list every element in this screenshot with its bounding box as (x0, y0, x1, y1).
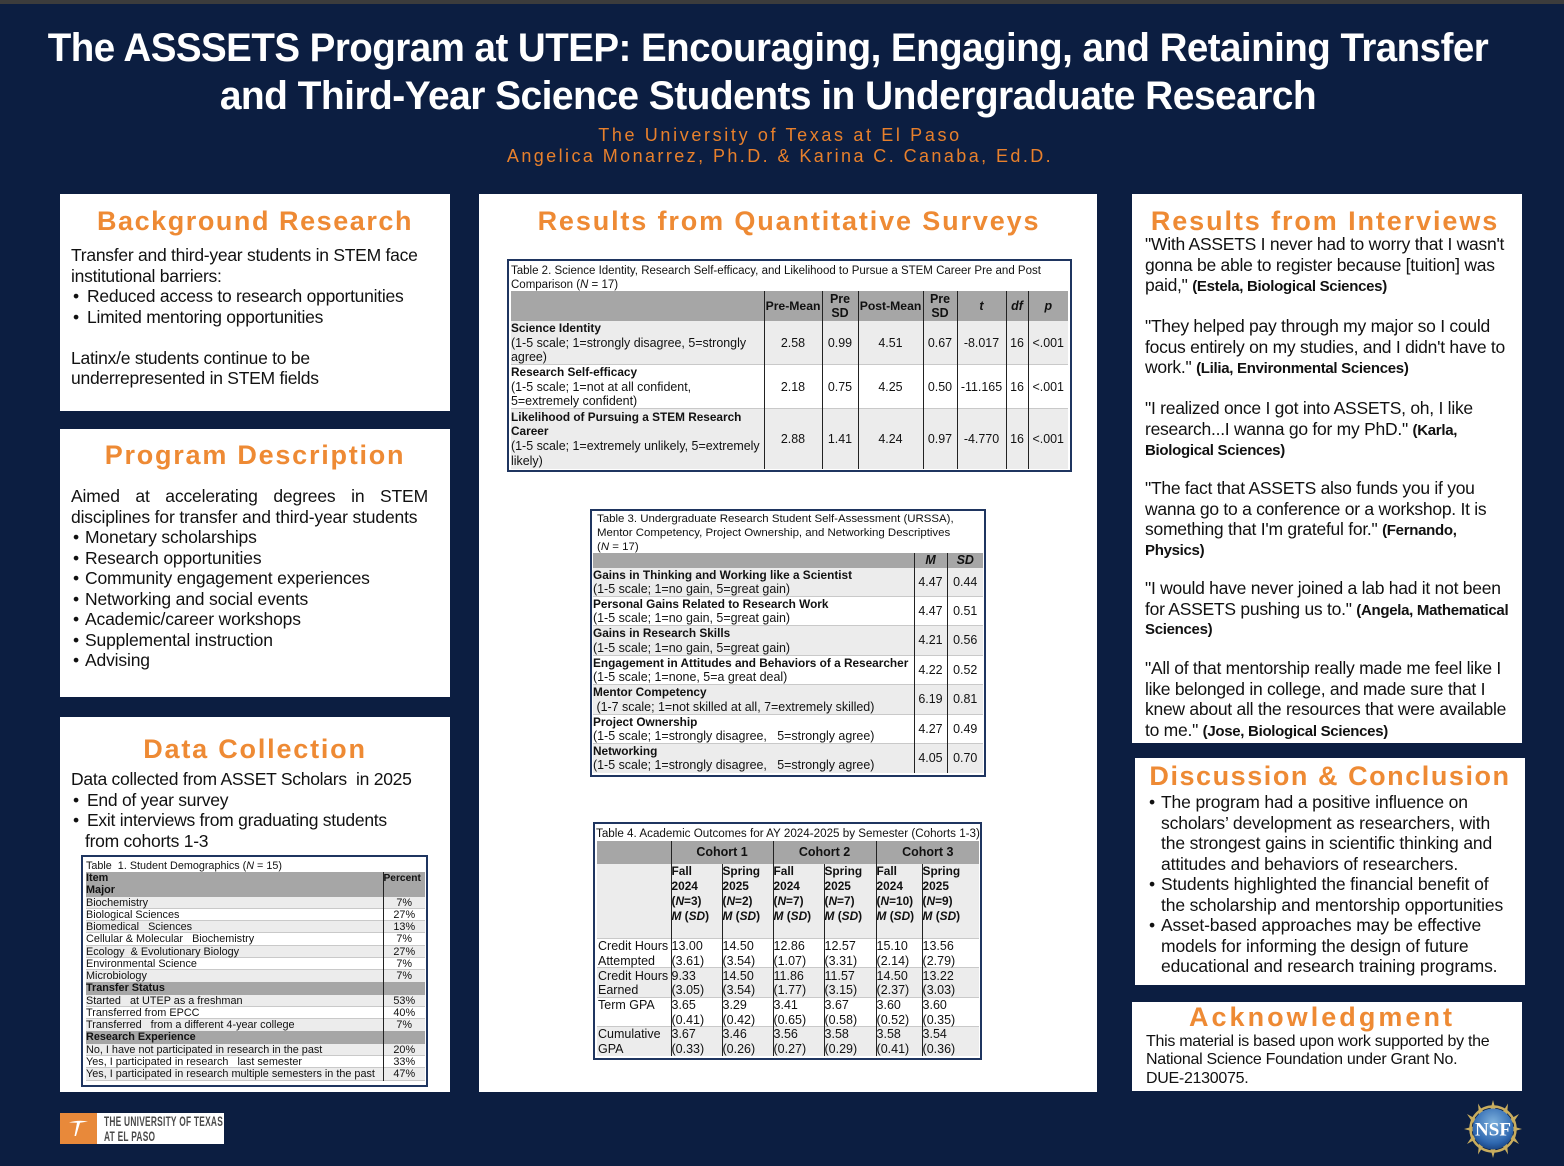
table 3 data: 0.70 (953, 751, 977, 765)
panel: background research (60, 194, 450, 411)
table 3 data: (1-7 scale; 1=not skilled at all, 7=extremely skilled) (596, 700, 874, 714)
table 4 data: 3.65 (672, 998, 696, 1012)
table 4 data: (3.31) (825, 954, 857, 968)
heading: discussion and conclusion: Discussion & Conclusion (1149, 761, 1511, 791)
table 4 data: Credit Hours (598, 968, 668, 982)
text: program description: disciplines for transfer and third-year students (71, 506, 417, 526)
authors and affiliation: Angelica Monarrez, Ph.D. & Karina C. Canaba, Ed.D. (507, 146, 1053, 166)
quote: Estela: "With ASSETS I never had to worry that I wasn't (1145, 234, 1504, 254)
table 4 data: 15.10 (877, 939, 908, 953)
table 2 data: -4.770 (964, 432, 999, 446)
table 4 data: (0.42) (722, 1012, 755, 1026)
quote: Estela: gonna be able to register because [tuition] was (1145, 254, 1495, 274)
table 4 data: Spring (923, 864, 960, 878)
table 2 data: 16 (1010, 432, 1024, 446)
table 4 data: 3.29 (722, 998, 747, 1012)
table 4 data: (3.03) (923, 983, 955, 997)
logo wordmark: AT EL PASO (104, 1128, 155, 1144)
table 4 data: Cumulative (598, 1027, 661, 1041)
title (48, 26, 1488, 118)
table 3 data: 0.56 (953, 633, 977, 647)
table 2 caption: Table 2. Science Identity, Research Self-efficacy, and Likelihood to Pursue a STEM Career Pre and Post (511, 265, 1041, 277)
quote: Angela: "I would have never joined a lab had it not been (1145, 578, 1501, 598)
table 4 data: (N=7) (774, 894, 804, 908)
text: program description: Advising (85, 650, 150, 670)
text: background research: underrepresented in STEM fields (71, 368, 319, 388)
table 4 data: (0.29) (825, 1042, 857, 1056)
table 2 data: 16 (1010, 336, 1024, 350)
text: acknowledgment (1146, 1032, 1489, 1086)
table 4 data: Fall (672, 864, 692, 878)
table 4 data: (N=3) (672, 894, 702, 908)
table 3: URSSA descriptives (590, 509, 986, 777)
table 2 data: 2.18 (781, 380, 805, 394)
table 2 data: likely) (511, 454, 543, 468)
table 2 data: 4.24 (878, 432, 903, 446)
table 4 data: (3.54) (722, 954, 755, 968)
table 4 data: (0.41) (672, 1012, 704, 1026)
table 2 data: 4.51 (878, 336, 903, 350)
top bar (0, 0, 1564, 4)
quote: Lilia: work." (Lilia, Environmental Sciences) (1145, 357, 1409, 377)
table 2 data: 0.97 (928, 432, 952, 446)
quote: Fernando (1145, 478, 1486, 558)
table 4 data: (1.77) (774, 983, 806, 997)
table 3 data: 4.47 (918, 604, 943, 618)
table 2 data: 2.58 (781, 336, 805, 350)
table 4 data: (3.54) (722, 983, 755, 997)
table 4 data: 2025 (825, 879, 851, 893)
table 1 data: Percent (384, 872, 421, 884)
table 3 data: (1-5 scale; 1=no gain, 5=great gain) (593, 611, 790, 625)
heading: quantitative surveys: Results from Quantitative Surveys (538, 206, 1040, 236)
table 3 caption: Table 3. Undergraduate Research Student Self-Assessment (URSSA), (597, 513, 954, 525)
table 2 data: -11.165 (961, 380, 1002, 394)
table 4 data: 12.57 (825, 939, 856, 953)
quote: Karla: Biological Sciences) (1145, 442, 1285, 459)
table 4 data: 2024 (672, 879, 698, 893)
quote: Estela (1145, 234, 1504, 295)
quote: Angela: Sciences) (1145, 621, 1212, 638)
table 2 data: 4.25 (878, 380, 903, 394)
table 4 data: (0.36) (923, 1042, 955, 1056)
quote: Jose: knew about all the resources that were available (1145, 699, 1506, 719)
quote: Jose: "All of that mentorship really made me feel like I (1145, 658, 1501, 678)
text: program description: Aimed at accelerating degrees in STEM (71, 486, 428, 506)
quote: Karla: research...I wanna go for my PhD." (Karla, (1145, 418, 1457, 438)
table 3 data: 6.19 (918, 692, 943, 706)
table 3 data: Engagement in Attitudes and Behaviors of a Researcher (593, 656, 908, 670)
table 2 data: 0.75 (828, 380, 852, 394)
text: background research: institutional barriers: (71, 266, 222, 286)
table 4 data: (1.07) (774, 954, 806, 968)
panel: results from quantitative surveys (479, 194, 1097, 1092)
logo wordmark: THE UNIVERSITY OF TEXAS (104, 1114, 223, 1129)
table 4 data: Spring (722, 864, 760, 878)
table 4 data: (2.14) (877, 954, 909, 968)
table 4 data: (0.65) (774, 1012, 806, 1026)
table 4 caption: Table 4. Academic Outcomes for AY 2024-2025 by Semester (Cohorts 1-3) (596, 827, 980, 840)
table 2 data: Post-Mean (860, 299, 921, 313)
table 1 data: Yes, I participated in research multiple semesters in the past (86, 1068, 375, 1080)
text: discussion and conclusion: the scholarship and mentorship opportunities (1161, 894, 1503, 914)
table 3 data: (1-5 scale; 1=no gain, 5=great gain) (593, 640, 790, 654)
table 4 data: M (SD) (774, 909, 811, 923)
table 3 data: 0.49 (953, 722, 977, 736)
table 4 data: (2.79) (923, 954, 955, 968)
table 4 data: 3.41 (774, 998, 798, 1012)
table 2 data (511, 291, 1068, 469)
heading: results from interviews: Results from Interviews (1151, 206, 1499, 236)
table 4 data: 3.54 (923, 1027, 947, 1041)
table 4 data: 14.50 (877, 968, 908, 982)
text: data collection: from cohorts 1-3 (85, 830, 208, 850)
table 4 data: Fall (774, 864, 794, 878)
table 1 data: Transfer Status (86, 982, 165, 994)
table 4 data: M (SD) (672, 909, 709, 923)
table 2 data: SD (831, 306, 849, 320)
table 3 data: Project Ownership (593, 714, 697, 728)
table 2 data: p (1044, 299, 1052, 313)
quote: Karla: "I realized once I got into ASSETS, oh, I like (1145, 398, 1473, 418)
table 3 data: 0.81 (953, 692, 977, 706)
table 4 data: 3.60 (877, 998, 901, 1012)
text: program description: Supplemental instruction (85, 630, 273, 650)
table 2 data: Research Self-efficacy (511, 365, 637, 379)
table 2 data: 2.88 (781, 432, 805, 446)
quote: Jose: like belonged in college, and made sure that I (1145, 678, 1485, 698)
quote: Lilia: "They helped pay through my major so I could (1145, 316, 1490, 336)
table 2 data: df (1011, 299, 1023, 313)
text: discussion and conclusion: scholars’ development as researchers, with (1161, 812, 1490, 832)
table 3 data: Gains in Thinking and Working like a Scientist (593, 568, 852, 582)
table 4 data: 2025 (722, 879, 749, 893)
table 1 data: 7% (396, 933, 412, 945)
quote: Karla (1145, 398, 1473, 459)
table 3 data: Mentor Competency (593, 685, 707, 699)
text: discussion and conclusion: Students highlighted the financial benefit of (1161, 874, 1488, 894)
table 4 data: 12.86 (774, 939, 805, 953)
title: The ASSSETS Program at UTEP: Encouraging, Engaging, and Retaining Transfer (48, 26, 1488, 70)
text: data collection: Data collected from ASSET Scholars in 2025 (71, 769, 412, 789)
table 4 data: 13.56 (923, 939, 954, 953)
table 4 data: 3.67 (825, 998, 849, 1012)
table 2 data: (1-5 scale; 1=not at all confident, (511, 380, 691, 394)
table 3 data: Networking (593, 744, 657, 758)
text: program description: Research opportunities (85, 548, 261, 568)
table 3 data: (1-5 scale; 1=none, 5=a great deal) (593, 670, 787, 684)
text: program description: Monetary scholarships (85, 527, 257, 547)
table 3 data (593, 553, 983, 773)
table 4 data: 3.46 (722, 1027, 747, 1041)
text: program description: Academic/career workshops (85, 609, 301, 629)
table 3 data: (1-5 scale; 1=strongly disagree, 5=strongly agree) (593, 758, 874, 772)
text: discussion and conclusion (1150, 792, 1503, 976)
quote: Fernando: wanna go to a conference or a workshop. It is (1145, 498, 1486, 518)
table 3 data: 4.22 (918, 663, 943, 677)
table 2 data: <.001 (1032, 432, 1064, 446)
panel: acknowledgment (1132, 1002, 1522, 1091)
table 3 data: 0.52 (953, 663, 977, 677)
text: discussion and conclusion: models for informing the design of future (1161, 936, 1468, 956)
text: program description (71, 486, 428, 670)
table 4 data: 13.00 (672, 939, 703, 953)
table 2 data: <.001 (1032, 380, 1064, 394)
table 2 data: (1-5 scale; 1=extremely unlikely, 5=extremely (511, 439, 760, 453)
table 4 data: (0.52) (877, 1012, 909, 1026)
text: data collection: Exit interviews from graduating students (87, 810, 387, 830)
table 2: pre and post comparison (507, 259, 1072, 472)
text: background research (71, 245, 418, 388)
authors and affiliation: The University of Texas at El Paso (598, 125, 962, 145)
table 4 data: (N=10) (877, 894, 913, 908)
quote: Fernando: Physics) (1145, 542, 1204, 558)
table 2 data: (1-5 scale; 1=strongly disagree, 5=strongly (511, 336, 746, 350)
table 2 data: 0.67 (928, 336, 952, 350)
panel: program description (60, 429, 450, 697)
table 4 data: M (SD) (877, 909, 914, 923)
table 4 data: (0.41) (877, 1042, 909, 1056)
table 4 data: Earned (598, 983, 638, 997)
panel: results from interviews (1132, 194, 1522, 743)
table 4 data: 3.60 (923, 998, 947, 1012)
table 2 caption: Comparison (N = 17) (511, 279, 618, 291)
table 1 data (86, 872, 425, 1081)
table 4 data: (N=9) (923, 894, 953, 908)
heading: background research: Background Research (97, 206, 413, 236)
table 2 data: <.001 (1032, 336, 1064, 350)
icon: UTEP pick mark (60, 1113, 97, 1144)
quote: Lilia: focus entirely on my studies, and I didn't have to (1145, 336, 1505, 356)
text: acknowledgment: This material is based upon work supported by the (1146, 1032, 1489, 1050)
panel: discussion and conclusion (1135, 758, 1525, 985)
table 4 data: Term GPA (598, 998, 655, 1012)
table 4 data: 3.67 (672, 1027, 696, 1041)
title: and Third-Year Science Students in Undergraduate Research (220, 74, 1316, 118)
table 4 data: Cohort 1 (696, 845, 748, 859)
table 3 data: SD (957, 553, 974, 567)
table 2 data: Pre (930, 292, 950, 306)
table 4 data: (N=7) (825, 894, 855, 908)
table 1 caption: Table 1. Student Demographics (N = 15) (86, 860, 282, 872)
logo: NSF: NSF (1475, 1120, 1511, 1140)
quote: Estela: paid," (Estela, Biological Sciences) (1145, 275, 1387, 295)
table 2 data: 5=extremely confident) (511, 394, 637, 408)
table 4 data: (0.26) (722, 1042, 755, 1056)
table 3 caption: Mentor Competency, Project Ownership, and Networking Descriptives (597, 527, 950, 539)
table 2 data: 0.99 (828, 336, 852, 350)
table 4 data: Cohort 3 (902, 845, 953, 859)
table 4 data: 2025 (923, 879, 949, 893)
table 4 data: (0.33) (672, 1042, 704, 1056)
table 4 data (597, 841, 979, 1056)
table 1 data: Cellular & Molecular Biochemistry (86, 933, 254, 945)
table 4 data: 14.50 (722, 939, 754, 953)
table 2 data: Pre (830, 292, 850, 306)
table 4 data: (0.35) (923, 1012, 955, 1026)
table 3 caption (597, 513, 954, 553)
table 3 data: Gains in Research Skills (593, 626, 730, 640)
panel: data collection (60, 717, 450, 1092)
table 3 caption: (N = 17) (597, 541, 639, 553)
table 2 data: 0.50 (928, 380, 952, 394)
logo wordmark (104, 1114, 223, 1144)
table 4 data: (3.15) (825, 983, 857, 997)
heading: acknowledgment: Acknowledgment (1189, 1002, 1455, 1032)
table 3 data: (1-5 scale; 1=no gain, 5=great gain) (593, 582, 790, 596)
table 3 data: 4.27 (918, 722, 943, 736)
text: background research: Reduced access to research opportunities (87, 286, 403, 306)
table 4 data: 9.33 (672, 968, 696, 982)
table 4 data: 14.50 (722, 968, 754, 982)
quote: Jose (1145, 658, 1506, 740)
table 4 data: 2024 (877, 879, 903, 893)
table 2 caption (511, 265, 1041, 291)
text: acknowledgment: DUE-2130075. (1146, 1070, 1248, 1086)
table 4 data: (3.61) (672, 954, 704, 968)
table 4 data: 3.58 (877, 1027, 901, 1041)
table 2 data: Pre-Mean (766, 299, 820, 313)
text: background research: Limited mentoring opportunities (87, 306, 323, 326)
table 4 data: 2024 (774, 879, 800, 893)
table 2 data: SD (931, 306, 949, 320)
text: program description: Community engagement experiences (85, 568, 370, 588)
text: discussion and conclusion: educational and research training programs. (1161, 956, 1497, 976)
text: discussion and conclusion: the strongest gains in scientific thinking and (1161, 833, 1492, 853)
table 4 data: 3.58 (825, 1027, 849, 1041)
table 4 data: GPA (598, 1042, 623, 1056)
table 2 data: Science Identity (511, 321, 601, 335)
quote: Fernando: something that I'm grateful for." (Fernando, (1145, 519, 1457, 539)
authors and affiliation (507, 125, 1053, 166)
text: background research: Transfer and third-year students in STEM face (71, 245, 418, 265)
table 1 data: Major (86, 884, 115, 896)
quote: Fernando: "The fact that ASSETS also funds you if you (1145, 478, 1475, 498)
table 4 data: Credit Hours (598, 939, 668, 953)
table 3 data: 0.51 (953, 604, 977, 618)
quote: Angela (1145, 578, 1508, 638)
table 4 data: 11.86 (774, 968, 804, 982)
table 2 data: -8.017 (964, 336, 999, 350)
table 1 data: 47% (393, 1068, 415, 1080)
table 2 data: t (979, 299, 984, 313)
table 4: academic outcomes (593, 822, 982, 1060)
table 3 data: 4.21 (918, 633, 943, 647)
table 4 data: M (SD) (825, 909, 862, 923)
text: acknowledgment: National Science Foundation under Grant No. (1146, 1051, 1457, 1068)
text: program description: Networking and social events (85, 588, 308, 608)
quote: Angela: for ASSETS pushing us to." (Angela, Mathematical (1145, 598, 1508, 618)
table 4 data: (0.27) (774, 1042, 806, 1056)
quote: Lilia (1145, 316, 1505, 377)
table 3 data: 4.47 (918, 575, 943, 589)
table 4 data: M (SD) (722, 909, 760, 923)
heading: data collection: Data Collection (143, 734, 367, 764)
text: discussion and conclusion: attitudes and behaviors of researchers. (1161, 854, 1458, 874)
table 4 data: 11.57 (825, 968, 855, 982)
quote: Jose: to me." (Jose, Biological Sciences) (1145, 720, 1388, 740)
text: data collection (71, 769, 412, 850)
table 4 data: (0.58) (825, 1012, 857, 1026)
table 2 data: 1.41 (828, 432, 852, 446)
table 2 data: Career (511, 424, 548, 438)
table 3 data: 4.05 (918, 751, 943, 765)
logo: UTEP (60, 1113, 224, 1144)
table 4 data: 3.56 (774, 1027, 798, 1041)
table 1: student demographics (81, 855, 428, 1087)
table 2 data: Likelihood of Pursuing a STEM Research (511, 410, 741, 424)
table 2 data: agree) (511, 350, 547, 364)
text: discussion and conclusion: Asset-based approaches may be effective (1161, 915, 1481, 935)
table 4 data: Fall (877, 864, 897, 878)
table 4 data: Cohort 2 (799, 845, 850, 859)
text: background research: Latinx/e students continue to be (71, 348, 310, 368)
heading: program description: Program Description (105, 440, 405, 470)
logo: NSF (1464, 1100, 1522, 1158)
table 4 data: Attempted (598, 954, 655, 968)
table 3 data: Personal Gains Related to Research Work (593, 596, 828, 610)
table 4 data: Spring (825, 864, 862, 878)
text: discussion and conclusion: The program had a positive influence on (1161, 792, 1468, 812)
table 3 data: (1-5 scale; 1=strongly disagree, 5=strongly agree) (593, 729, 874, 743)
table 1 data: Research Experience (86, 1031, 196, 1043)
table 4 data: (N=2) (722, 894, 753, 908)
table 4 data: (3.05) (672, 983, 704, 997)
table 4 data: 13.22 (923, 968, 954, 982)
table 3 data: M (925, 553, 936, 567)
table 4 data: (2.37) (877, 983, 909, 997)
text: data collection: End of year survey (87, 790, 228, 810)
table 3 data: 0.44 (953, 575, 977, 589)
table 4 data: M (SD) (923, 909, 960, 923)
table 2 data: 16 (1010, 380, 1024, 394)
